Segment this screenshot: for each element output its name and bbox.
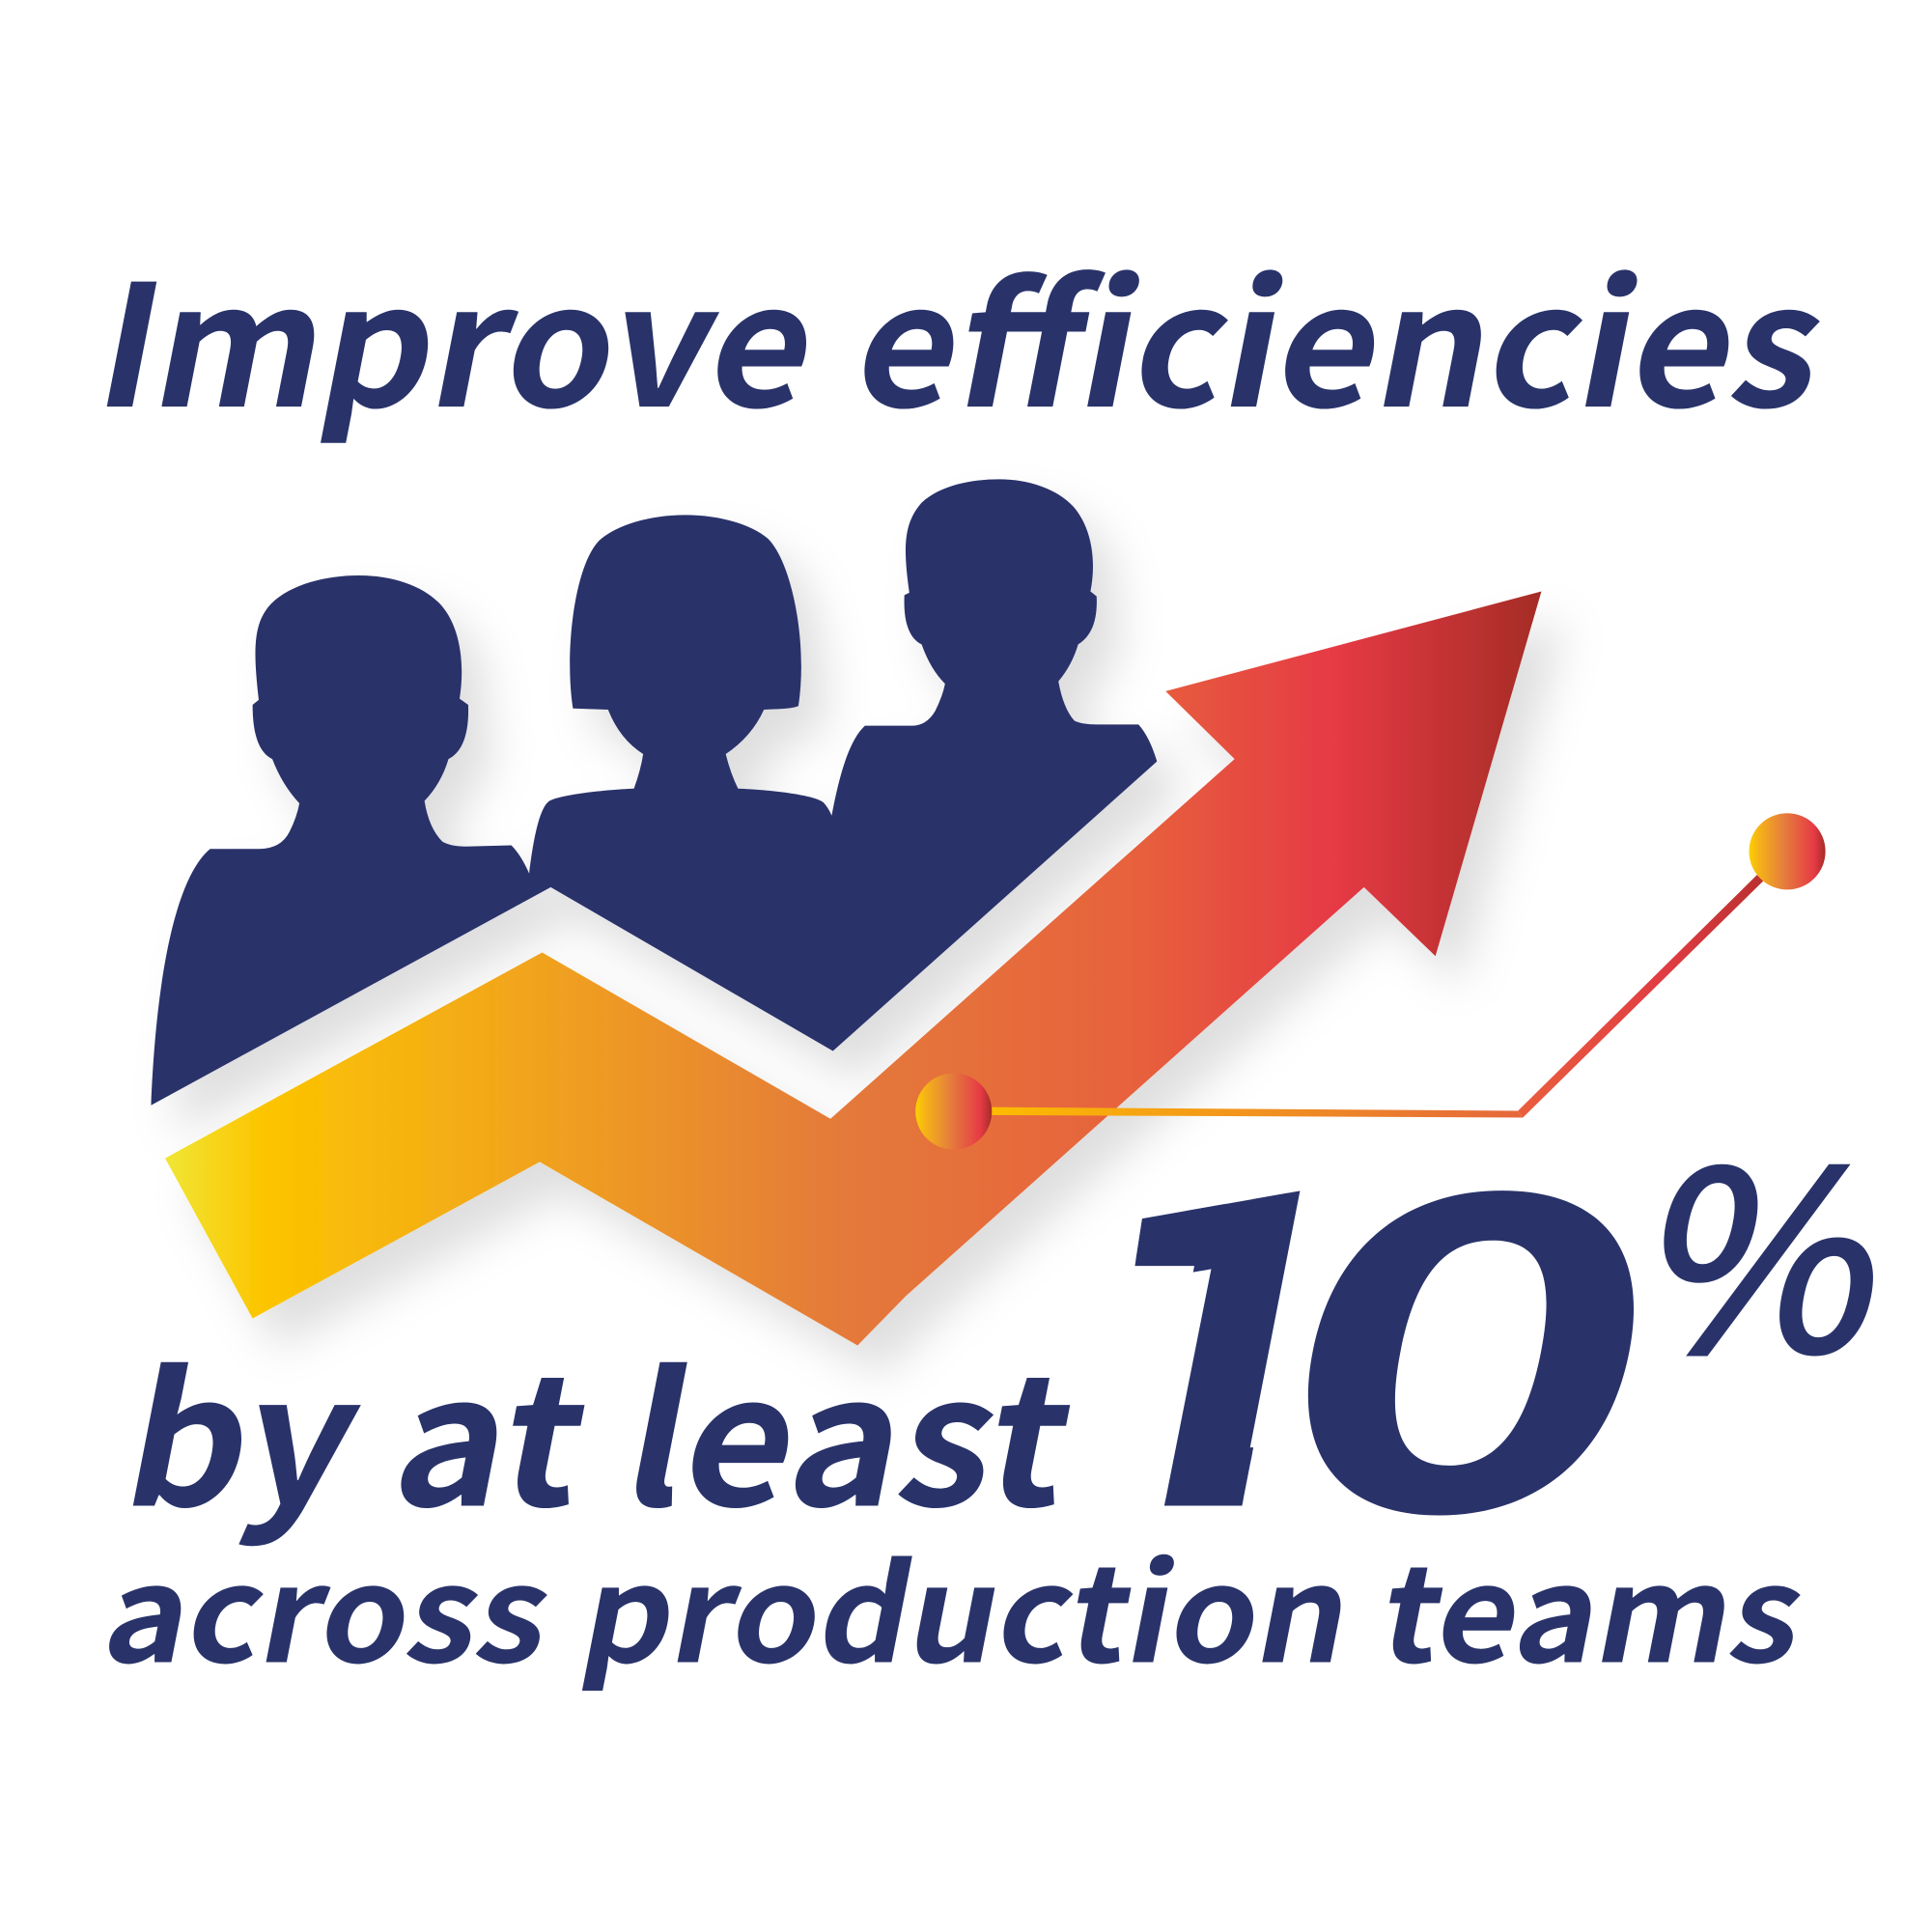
text: across production teams xyxy=(91,1509,1823,1701)
text: across production teams: production xyxy=(569,1509,1370,1701)
icon: outer dot xyxy=(1749,813,1826,889)
text: across production teams: across xyxy=(91,1509,570,1701)
icon: dot on arrow xyxy=(915,1074,992,1150)
text: by at least: least xyxy=(607,1298,1098,1558)
connector line from arrow to outer dot xyxy=(986,875,1763,1117)
icon: three people silhouette xyxy=(151,479,1157,1106)
big number: 10%: % xyxy=(1620,1065,1923,1422)
big number: 10%: 1 xyxy=(1004,1002,1435,1631)
text: across production teams: teams xyxy=(1367,1509,1823,1701)
text: by at least: at xyxy=(377,1298,612,1558)
text: by at least xyxy=(108,1298,1098,1558)
arrow: rising gradient arrow xyxy=(165,592,1541,1346)
big number: 10% xyxy=(1135,1164,1873,1516)
heading: Improve efficiencies: Improve xyxy=(82,210,840,456)
big number: 10%: 0 xyxy=(1230,1006,1724,1635)
heading: Improve efficiencies: efficiencies xyxy=(839,210,1848,456)
text: by at least: by xyxy=(108,1298,384,1558)
heading: Improve efficiencies xyxy=(82,210,1848,456)
